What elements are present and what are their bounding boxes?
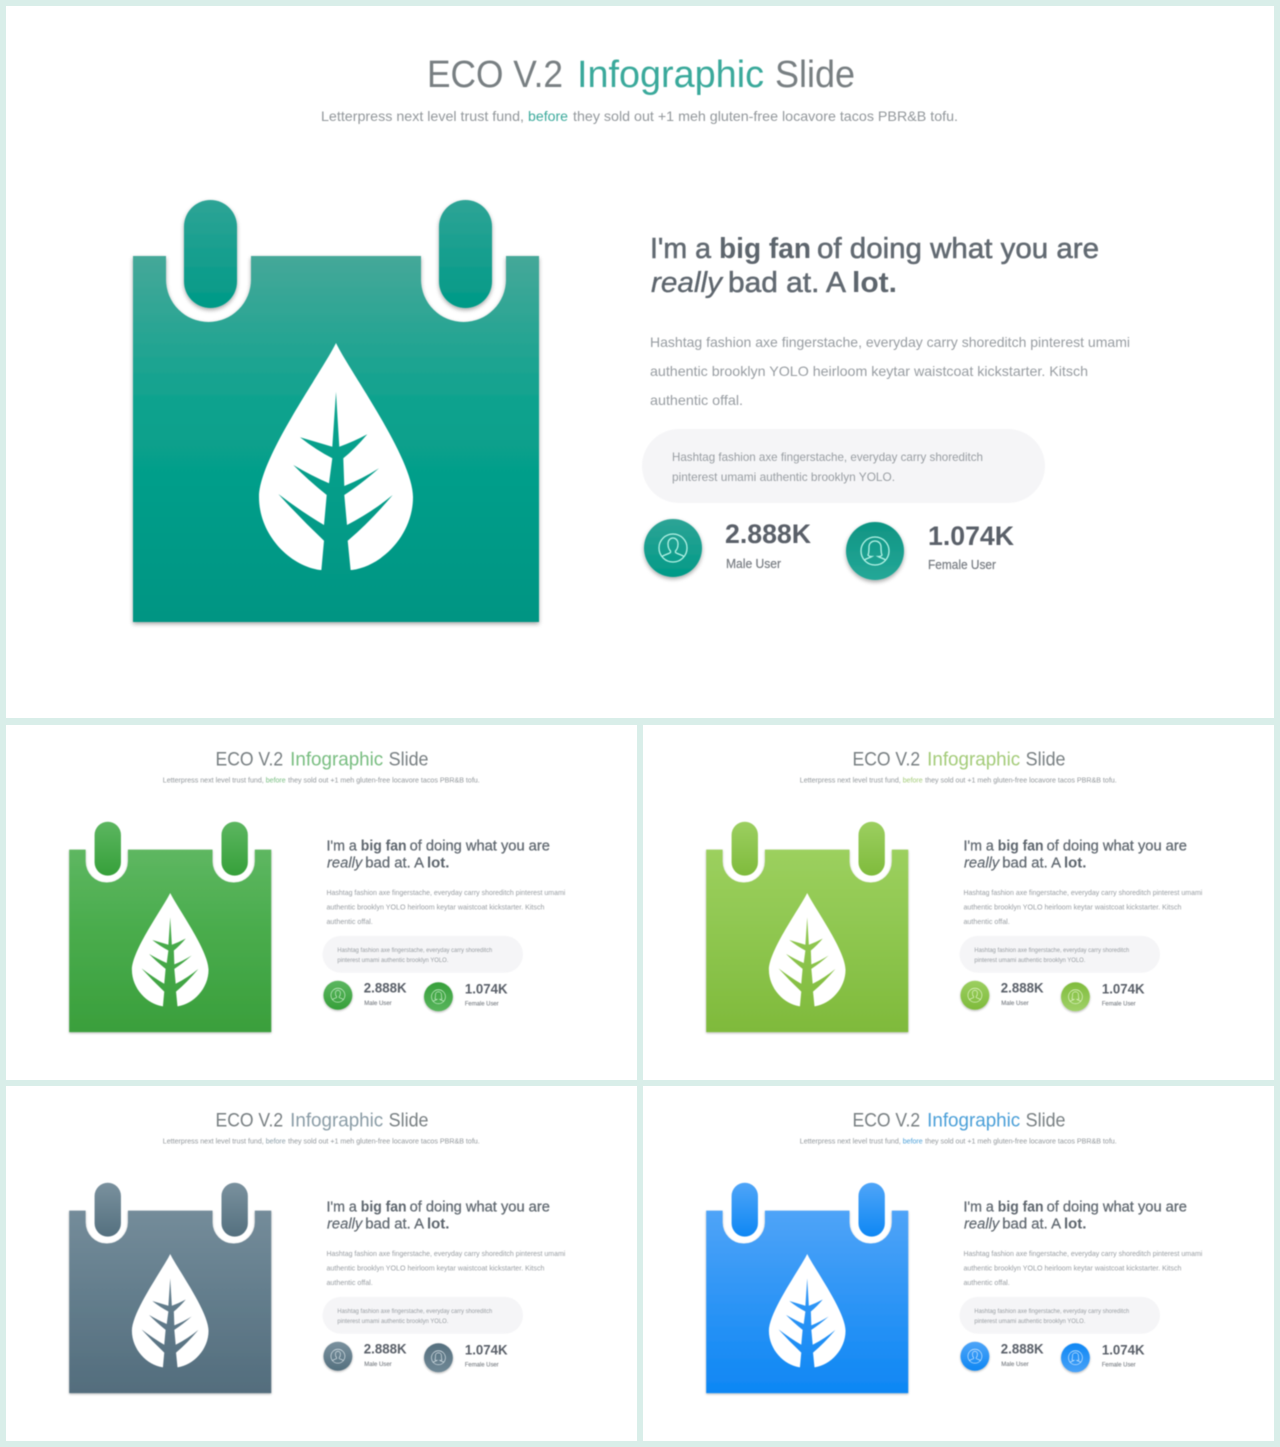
icon: female user [1061, 982, 1090, 1011]
body text: Hashtag fashion axe fingerstache, everyday carry shoreditch pinterest umami [650, 334, 1130, 350]
stat: female users: 1.074K [1102, 982, 1145, 997]
stat: female users: Female User [465, 1362, 499, 1369]
heading: of doing what you are [817, 233, 1099, 265]
callout pill: Hashtag fashion axe fingerstache, everyday carry shoreditch [974, 948, 1129, 954]
stat: female users: 1.074K [465, 982, 508, 997]
title: Slide [389, 1110, 428, 1131]
subtitle: they sold out +1 meh gluten-free locavore tacos PBR&B tofu. [925, 777, 1117, 784]
title: Slide [1026, 1110, 1065, 1131]
callout pill [642, 429, 1045, 503]
callout pill: pinterest umami authentic brooklyn YOLO. [974, 1319, 1086, 1325]
icon: female user [1061, 1343, 1090, 1372]
callout pill: pinterest umami authentic brooklyn YOLO. [337, 958, 449, 964]
body text: authentic brooklyn YOLO heirloom keytar waistcoat kickstarter. Kitsch [963, 1265, 1182, 1272]
callout pill: Hashtag fashion axe fingerstache, everyday carry shoreditch [974, 1309, 1129, 1315]
title: ECO V.2 [853, 749, 920, 770]
body text: authentic brooklyn YOLO heirloom keytar waistcoat kickstarter. Kitsch [326, 904, 545, 911]
stat: female users [928, 521, 1014, 572]
title: Infographic [927, 1110, 1020, 1131]
body text [650, 334, 1130, 408]
subtitle: they sold out +1 meh gluten-free locavore tacos PBR&B tofu. [925, 1138, 1117, 1145]
heading: of doing what you are [1047, 1200, 1187, 1216]
stat: male users: 2.888K [1001, 981, 1044, 996]
callout pill [959, 936, 1160, 973]
heading: lot. [427, 856, 449, 872]
stat: female users: 1.074K [1102, 1343, 1145, 1358]
title: ECO V.2 [853, 1110, 920, 1131]
callout pill: pinterest umami authentic brooklyn YOLO. [974, 958, 1086, 964]
stat: male users: Male User [364, 1000, 392, 1007]
subtitle [163, 1138, 480, 1145]
heading: big fan [361, 839, 407, 855]
stat: female users [1102, 1343, 1145, 1369]
body text [326, 1251, 566, 1287]
heading: big fan [719, 233, 811, 265]
subtitle: Letterpress next level trust fund, [800, 1138, 901, 1145]
subtitle: before [903, 777, 923, 784]
stat: male users: Male User [1001, 1000, 1029, 1007]
stat: male users: 2.888K [1001, 1342, 1044, 1357]
heading: I'm a [326, 839, 358, 855]
title: Infographic [577, 54, 764, 96]
icon: male user [644, 519, 702, 577]
heading: big fan [998, 1200, 1044, 1216]
panel: main teal slide [6, 6, 1274, 718]
heading [326, 1200, 550, 1233]
title: ECO V.2 [216, 749, 283, 770]
stat: male users: 2.888K [364, 981, 407, 996]
title: Slide [775, 54, 855, 96]
stat: male users [364, 1342, 407, 1368]
stat: female users: 1.074K [928, 521, 1014, 551]
subtitle [800, 777, 1117, 784]
title [853, 1110, 1065, 1131]
stat: male users [1001, 1342, 1044, 1368]
title: ECO V.2 [427, 54, 563, 96]
heading: lot. [427, 1217, 449, 1233]
icon: calendar with leaf [133, 200, 539, 622]
icon: male user [960, 981, 989, 1010]
title: Slide [389, 749, 428, 770]
callout pill: Hashtag fashion axe fingerstache, everyday carry shoreditch [337, 1309, 492, 1315]
stat: female users [1102, 982, 1145, 1008]
callout pill [322, 1297, 523, 1334]
icon: calendar with leaf [706, 822, 908, 1032]
stat: male users [1001, 981, 1044, 1007]
heading: of doing what you are [1047, 839, 1187, 855]
body text: authentic offal. [963, 919, 1010, 926]
title: Infographic [290, 749, 383, 770]
subtitle: Letterpress next level trust fund, [321, 108, 524, 124]
heading [650, 233, 1099, 299]
stat: female users: Female User [1102, 1001, 1136, 1008]
body text: Hashtag fashion axe fingerstache, everyday carry shoreditch pinterest umami [326, 1251, 566, 1258]
stat: male users: 2.888K [725, 519, 811, 549]
heading: really [964, 856, 1000, 872]
panel: blue slide [643, 1086, 1274, 1441]
panel: slate slide [6, 1086, 637, 1441]
body text: authentic offal. [326, 1280, 373, 1287]
subtitle [321, 108, 958, 124]
heading: really [964, 1217, 1000, 1233]
body text: authentic brooklyn YOLO heirloom keytar waistcoat kickstarter. Kitsch [963, 904, 1182, 911]
title: Slide [1026, 749, 1065, 770]
stat: male users: 2.888K [364, 1342, 407, 1357]
callout pill [959, 1297, 1160, 1334]
body text: authentic brooklyn YOLO heirloom keytar waistcoat kickstarter. Kitsch [326, 1265, 545, 1272]
body text: Hashtag fashion axe fingerstache, everyday carry shoreditch pinterest umami [963, 1251, 1203, 1258]
stat: male users: Male User [1001, 1361, 1029, 1368]
subtitle: they sold out +1 meh gluten-free locavore tacos PBR&B tofu. [288, 777, 480, 784]
heading: lot. [852, 267, 897, 299]
subtitle: they sold out +1 meh gluten-free locavore tacos PBR&B tofu. [573, 108, 958, 124]
subtitle: they sold out +1 meh gluten-free locavore tacos PBR&B tofu. [288, 1138, 480, 1145]
icon: male user [960, 1342, 989, 1371]
subtitle: before [528, 108, 568, 124]
stat: male users: Male User [364, 1361, 392, 1368]
body text: authentic offal. [326, 919, 373, 926]
body text: Hashtag fashion axe fingerstache, everyday carry shoreditch pinterest umami [963, 890, 1203, 897]
icon: female user [424, 982, 453, 1011]
heading: bad at. A [728, 267, 847, 299]
stat: female users: Female User [465, 1001, 499, 1008]
icon: calendar with leaf [69, 1183, 271, 1393]
heading [963, 1200, 1187, 1233]
panel: lime slide [643, 725, 1274, 1080]
body text [963, 1251, 1203, 1287]
title: Infographic [927, 749, 1020, 770]
callout pill: pinterest umami authentic brooklyn YOLO. [672, 470, 895, 484]
heading: bad at. A [1002, 856, 1061, 872]
heading: lot. [1064, 856, 1086, 872]
title: ECO V.2 [216, 1110, 283, 1131]
stat: female users: Female User [928, 557, 997, 572]
heading: really [327, 856, 363, 872]
stat: male users [725, 519, 811, 571]
heading: I'm a [963, 1200, 995, 1216]
heading: bad at. A [365, 1217, 424, 1233]
callout pill: Hashtag fashion axe fingerstache, everyday carry shoreditch [337, 948, 492, 954]
callout pill: Hashtag fashion axe fingerstache, everyday carry shoreditch [672, 450, 983, 464]
body text: Hashtag fashion axe fingerstache, everyday carry shoreditch pinterest umami [326, 890, 566, 897]
subtitle: before [266, 1138, 286, 1145]
heading: big fan [361, 1200, 407, 1216]
heading: of doing what you are [410, 1200, 550, 1216]
heading: bad at. A [365, 856, 424, 872]
subtitle: before [903, 1138, 923, 1145]
title: Infographic [290, 1110, 383, 1131]
heading: I'm a [326, 1200, 358, 1216]
subtitle [800, 1138, 1117, 1145]
panel: green slide [6, 725, 637, 1080]
body text: authentic offal. [963, 1280, 1010, 1287]
icon: male user [323, 1342, 352, 1371]
heading: big fan [998, 839, 1044, 855]
heading: I'm a [650, 233, 712, 265]
heading: really [327, 1217, 363, 1233]
heading [963, 839, 1187, 872]
stat: male users [364, 981, 407, 1007]
stat: female users: 1.074K [465, 1343, 508, 1358]
heading: lot. [1064, 1217, 1086, 1233]
subtitle: Letterpress next level trust fund, [163, 1138, 264, 1145]
heading [326, 839, 550, 872]
title [427, 54, 855, 96]
title [216, 1110, 428, 1131]
callout pill: pinterest umami authentic brooklyn YOLO. [337, 1319, 449, 1325]
heading: really [651, 267, 724, 299]
icon: female user [424, 1343, 453, 1372]
heading: of doing what you are [410, 839, 550, 855]
title [216, 749, 428, 770]
heading: I'm a [963, 839, 995, 855]
body text [963, 890, 1203, 926]
stat: female users: Female User [1102, 1362, 1136, 1369]
icon: female user [846, 522, 904, 580]
stat: female users [465, 982, 508, 1008]
subtitle [163, 777, 480, 784]
icon: male user [323, 981, 352, 1010]
body text [326, 890, 566, 926]
subtitle: Letterpress next level trust fund, [800, 777, 901, 784]
subtitle: Letterpress next level trust fund, [163, 777, 264, 784]
body text: authentic brooklyn YOLO heirloom keytar waistcoat kickstarter. Kitsch [650, 363, 1088, 379]
subtitle: before [266, 777, 286, 784]
icon: calendar with leaf [69, 822, 271, 1032]
callout pill [322, 936, 523, 973]
icon: calendar with leaf [706, 1183, 908, 1393]
body text: authentic offal. [650, 392, 743, 408]
heading: bad at. A [1002, 1217, 1061, 1233]
title [853, 749, 1065, 770]
stat: female users [465, 1343, 508, 1369]
stat: male users: Male User [726, 556, 782, 571]
